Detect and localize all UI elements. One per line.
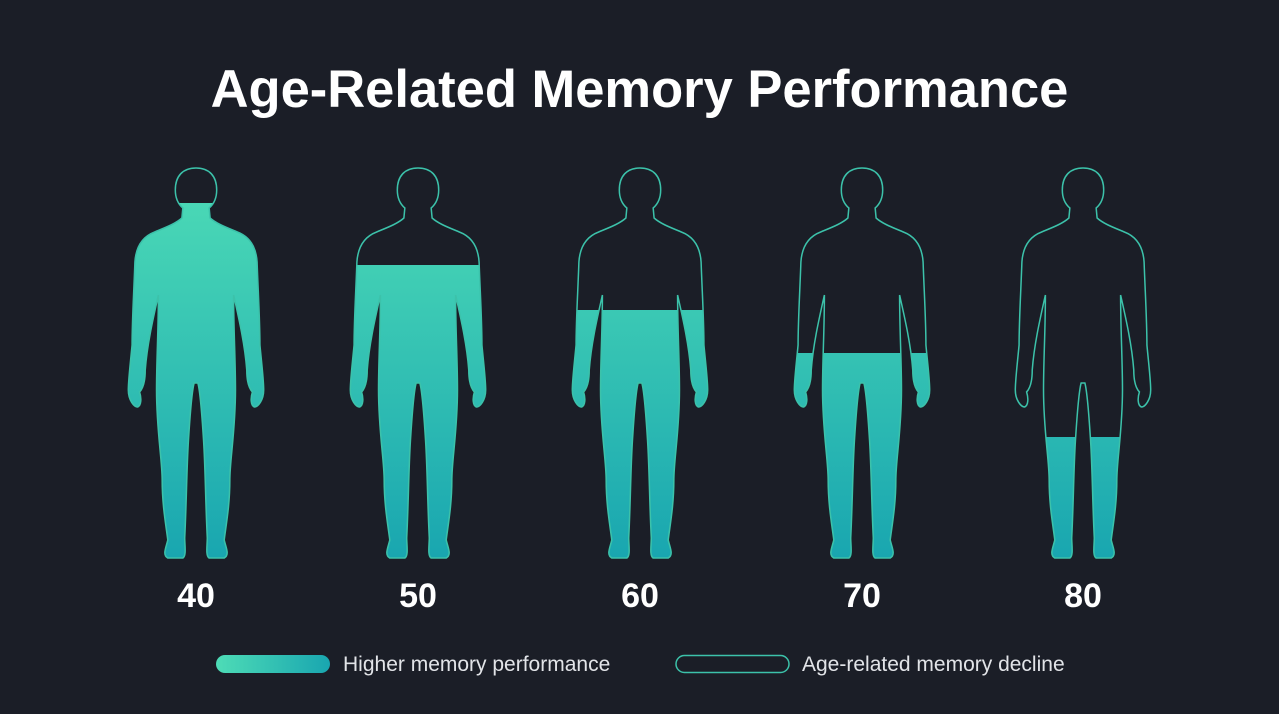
- figure: age 60: [572, 168, 708, 558]
- title: Age-Related Memory Performance: [211, 60, 1068, 119]
- legend: higher memory performance: Higher memory performance: [343, 653, 610, 676]
- figure: age 50: [350, 168, 486, 558]
- legend: age-related memory decline: Age-related memory decline: [802, 653, 1065, 676]
- age labels: 40: [177, 577, 215, 615]
- age labels: 50: [399, 577, 437, 615]
- figure: age 70: [794, 168, 930, 558]
- age labels: 80: [1064, 577, 1102, 615]
- age labels: 60: [621, 577, 659, 615]
- legend: higher memory performance: [216, 653, 610, 676]
- age labels: [177, 577, 1102, 615]
- legend: age-related memory decline: [676, 653, 1065, 676]
- figure: age 40: [128, 168, 264, 558]
- figure: age 80: [1015, 168, 1151, 558]
- age labels: 70: [843, 577, 881, 615]
